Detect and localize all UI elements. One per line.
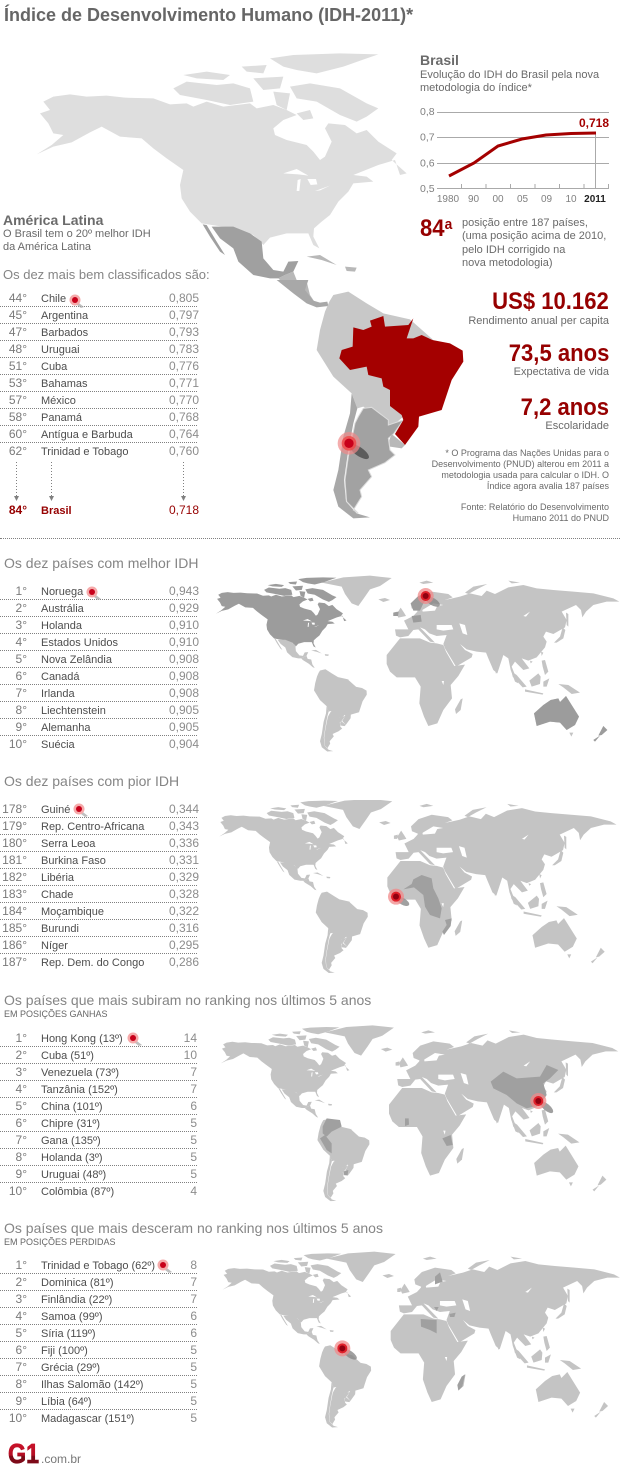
- table: rose most: 5: [190, 1150, 197, 1164]
- table: Latin America ranking: 44°: [9, 291, 27, 305]
- table: Latin America ranking: México: [41, 395, 76, 407]
- table: fell most: 10°: [9, 1411, 27, 1425]
- table: Latin America ranking: 60°: [9, 427, 27, 441]
- stat: income: US$ 10.162: [492, 288, 609, 315]
- row: Brasil: 0,718: [169, 503, 199, 517]
- line chart: IDH evolution: 2011: [584, 194, 606, 205]
- footnote: Índice agora avalia 187 países: [487, 481, 609, 491]
- table: best HDI: Holanda: [41, 620, 82, 632]
- table: rose most: 7°: [16, 1133, 27, 1147]
- table: worst HDI: 186°: [2, 938, 27, 952]
- table: Latin America ranking: 51°: [9, 359, 27, 373]
- table: Latin America ranking: Antígua e Barbuda: [41, 429, 133, 441]
- table: best HDI: Liechtenstein: [41, 705, 106, 717]
- heading: fell most: Os países que mais desceram no ranking nos últimos 5 anos: [4, 1220, 383, 1236]
- table: rose most: [0, 1031, 197, 1198]
- text: position: (uma posição acima de 2010,: [462, 230, 606, 242]
- table: worst HDI: Chade: [41, 889, 73, 901]
- table: worst HDI: 0,295: [169, 938, 199, 952]
- source: [461, 502, 609, 523]
- table: fell most: [0, 1258, 197, 1425]
- table: worst HDI: Rep. Centro-Africana: [41, 821, 144, 833]
- line chart: IDH evolution: [420, 106, 609, 205]
- table: worst HDI: Libéria: [41, 872, 74, 884]
- row: Brasil: [9, 503, 199, 517]
- table: worst HDI: 0,344: [169, 802, 199, 816]
- text: position: nova metodologia): [462, 257, 553, 269]
- line chart: IDH evolution: 1980: [437, 194, 460, 205]
- table: worst HDI: Moçambique: [41, 906, 104, 918]
- table: fell most: Madagascar (151º): [41, 1413, 134, 1425]
- table: fell most: Ilhas Salomão (142º): [41, 1379, 143, 1391]
- table: worst HDI: Rep. Dem. do Congo: [41, 957, 144, 969]
- table: worst HDI: Burkina Faso: [41, 855, 106, 867]
- table: rose most: Venezuela (73º): [41, 1067, 119, 1079]
- table: best HDI: Noruega: [41, 586, 83, 598]
- table: rose most: 7: [190, 1082, 197, 1096]
- table: fell most: 8: [190, 1258, 197, 1272]
- table: best HDI: 4°: [16, 635, 27, 649]
- table: best HDI: 0,908: [169, 652, 199, 666]
- panel: América Latina: [3, 212, 210, 282]
- line chart: IDH evolution: 0,5: [420, 183, 435, 195]
- line chart: IDH evolution: 90: [468, 194, 479, 205]
- table: best HDI: [0, 584, 199, 751]
- table: rose most: Colômbia (87º): [41, 1186, 114, 1198]
- row: Brasil: 84°: [9, 503, 27, 517]
- table: rose most: 5°: [16, 1099, 27, 1113]
- callout: 84th position: [420, 215, 606, 269]
- line chart: IDH evolution: 09: [541, 194, 552, 205]
- table: worst HDI: 182°: [2, 870, 27, 884]
- table: worst HDI: 0,328: [169, 887, 199, 901]
- table: rose most: Cuba (51º): [41, 1050, 94, 1062]
- table: best HDI: 0,943: [169, 584, 199, 598]
- footnote: [432, 448, 609, 491]
- arrows: down to Brasil: [14, 462, 186, 501]
- line chart: IDH evolution: 0,718: [579, 116, 609, 130]
- stat: income: [468, 288, 609, 327]
- table: fell most: 5: [190, 1394, 197, 1408]
- line chart: IDH evolution: 0,6: [420, 158, 435, 170]
- footnote: metodologia usada para calcular o IDH. O: [441, 470, 609, 480]
- subheading: top ten: Os dez mais bem classificados são:: [3, 267, 210, 282]
- table: fell most: 5: [190, 1343, 197, 1357]
- table: rose most: 7: [190, 1065, 197, 1079]
- table: Latin America ranking: 0,768: [169, 410, 199, 424]
- table: rose most: 8°: [16, 1150, 27, 1164]
- table: Latin America ranking: 0,771: [169, 376, 199, 390]
- table: worst HDI: 0,336: [169, 836, 199, 850]
- map: fell most: [223, 1252, 620, 1428]
- table: Latin America ranking: Trinidad e Tobago: [41, 446, 128, 458]
- table: Latin America ranking: 0,805: [169, 291, 199, 305]
- table: Latin America ranking: Panamá: [41, 412, 82, 424]
- table: worst HDI: Serra Leoa: [41, 838, 95, 850]
- table: rose most: 10: [184, 1048, 197, 1062]
- table: fell most: 6°: [16, 1343, 27, 1357]
- table: best HDI: 6°: [16, 669, 27, 683]
- table: fell most: 5°: [16, 1326, 27, 1340]
- table: best HDI: 9°: [16, 720, 27, 734]
- table: worst HDI: 0,316: [169, 921, 199, 935]
- table: best HDI: 7°: [16, 686, 27, 700]
- line chart: IDH evolution: 0,8: [420, 106, 435, 118]
- pin: Chile on map: [338, 432, 371, 462]
- heading: worst HDI: Os dez países com pior IDH: [4, 773, 179, 789]
- heading: best HDI: Os dez países com melhor IDH: [4, 555, 199, 571]
- table: Latin America ranking: 0,760: [169, 444, 199, 458]
- heading: rose most: Os países que mais subiram no ranking nos últimos 5 anos: [4, 992, 371, 1008]
- table: Latin America ranking: 0,783: [169, 342, 199, 356]
- table: best HDI: 0,929: [169, 601, 199, 615]
- table: best HDI: 5°: [16, 652, 27, 666]
- table: fell most: 7: [190, 1275, 197, 1289]
- text: position: [462, 217, 606, 269]
- table: best HDI: 1°: [16, 584, 27, 598]
- table: best HDI: 8°: [16, 703, 27, 717]
- map: best HDI: [216, 576, 619, 752]
- icon: Guinea pin: [74, 804, 88, 817]
- table: best HDI: 0,910: [169, 635, 199, 649]
- table: Latin America ranking: 57°: [9, 393, 27, 407]
- subheading: positions gained: EM POSIÇÕES GANHAS: [4, 1009, 108, 1019]
- table: Latin America ranking: 45°: [9, 308, 27, 322]
- text: position: pelo IDH corrigido na: [462, 244, 565, 256]
- table: best HDI: 10°: [9, 737, 27, 751]
- table: worst HDI: Níger: [41, 940, 68, 952]
- table: worst HDI: 0,331: [169, 853, 199, 867]
- table: rose most: 2°: [16, 1048, 27, 1062]
- stat: schooling: Escolaridade: [545, 420, 609, 432]
- table: Latin America ranking: [0, 291, 199, 458]
- table: fell most: Trinidad e Tobago (62º): [41, 1260, 155, 1272]
- table: rose most: Uruguai (48º): [41, 1169, 106, 1181]
- icon: Chile pin: [70, 294, 84, 308]
- table: best HDI: 3°: [16, 618, 27, 632]
- subtitle: evolution: metodologia do índice*: [420, 82, 532, 94]
- table: Latin America ranking: Uruguai: [41, 344, 80, 356]
- table: rose most: Gana (135º): [41, 1135, 101, 1147]
- icon: Hong Kong pin: [128, 1032, 142, 1046]
- table: worst HDI: 178°: [2, 802, 27, 816]
- line chart: IDH evolution: 0,7: [420, 132, 435, 144]
- table: rose most: 1°: [16, 1031, 27, 1045]
- North America: [37, 53, 407, 305]
- table: best HDI: 2°: [16, 601, 27, 615]
- table: worst HDI: Burundi: [41, 923, 79, 935]
- title: Índice de Desenvolvimento Humano (IDH-2011)*: [4, 5, 413, 25]
- table: fell most: Fiji (100º): [41, 1345, 88, 1357]
- table: fell most: Dominica (81º): [41, 1277, 113, 1289]
- line chart: IDH evolution: 10: [565, 194, 577, 205]
- map: Americas with Brazil highlighted: [38, 54, 464, 518]
- table: Latin America ranking: 47°: [9, 325, 27, 339]
- table: Latin America ranking: Argentina: [41, 310, 88, 322]
- subheading: positions lost: EM POSIÇÕES PERDIDAS: [4, 1237, 116, 1247]
- stat: life expectancy: 73,5 anos: [508, 340, 609, 367]
- table: Latin America ranking: 0,764: [169, 427, 199, 441]
- text: position: posição entre 187 países,: [462, 217, 588, 229]
- table: rose most: 3°: [16, 1065, 27, 1079]
- table: worst HDI: [0, 802, 199, 969]
- table: best HDI: Canadá: [41, 671, 80, 683]
- table: fell most: 5: [190, 1360, 197, 1374]
- table: best HDI: Estados Unidos: [41, 637, 118, 649]
- footnote: * O Programa das Nações Unidas para o: [445, 448, 609, 458]
- table: best HDI: 0,908: [169, 669, 199, 683]
- table: worst HDI: 185°: [2, 921, 27, 935]
- panel: Brasil evolution: [420, 52, 600, 94]
- table: rose most: Hong Kong (13º): [41, 1033, 123, 1045]
- row: Brasil: Brasil: [41, 505, 72, 517]
- table: fell most: 1°: [16, 1258, 27, 1272]
- table: worst HDI: 184°: [2, 904, 27, 918]
- table: Latin America ranking: 48°: [9, 342, 27, 356]
- table: Latin America ranking: Chile: [41, 293, 66, 305]
- table: rose most: 5: [190, 1133, 197, 1147]
- table: fell most: 4°: [16, 1309, 27, 1323]
- logo text: .com.br: [41, 1452, 81, 1466]
- footnote: Desenvolvimento (PNUD) alterou em 2011 a: [432, 459, 609, 469]
- table: worst HDI: 180°: [2, 836, 27, 850]
- table: best HDI: 0,905: [169, 703, 199, 717]
- number: 84a: 84a: [420, 215, 452, 242]
- table: best HDI: Nova Zelândia: [41, 654, 112, 666]
- table: fell most: 8°: [16, 1377, 27, 1391]
- table: rose most: 4°: [16, 1082, 27, 1096]
- table: rose most: Holanda (3º): [41, 1152, 102, 1164]
- stat: life expectancy: Expectativa de vida: [514, 366, 609, 378]
- table: best HDI: 0,908: [169, 686, 199, 700]
- table: rose most: 10°: [9, 1184, 27, 1198]
- subtitle: evolution: Evolução do IDH do Brasil pela nova: [420, 69, 599, 81]
- source: Humano 2011 do PNUD: [513, 513, 609, 523]
- table: rose most: 5: [190, 1167, 197, 1181]
- map: worst HDI: [220, 800, 616, 973]
- table: worst HDI: 187°: [2, 955, 27, 969]
- table: rose most: 5: [190, 1116, 197, 1130]
- table: fell most: 6: [190, 1326, 197, 1340]
- table: Latin America ranking: Cuba: [41, 361, 67, 373]
- table: Latin America ranking: 62°: [9, 444, 27, 458]
- table: Latin America ranking: 0,770: [169, 393, 199, 407]
- table: best HDI: Suécia: [41, 739, 75, 751]
- table: fell most: 5: [190, 1411, 197, 1425]
- heading: América Latina: América Latina: [3, 212, 103, 228]
- table: rose most: 4: [190, 1184, 197, 1198]
- table: fell most: Finlândia (22º): [41, 1294, 112, 1306]
- table: fell most: Líbia (64º): [41, 1396, 92, 1408]
- subtitle: Brasil in Latin America: O Brasil tem o 20º melhor IDH: [3, 228, 151, 240]
- icon: Norway pin: [86, 586, 101, 600]
- table: worst HDI: 0,329: [169, 870, 199, 884]
- table: fell most: 7°: [16, 1360, 27, 1374]
- South America: [277, 280, 463, 518]
- table: Latin America ranking: 0,793: [169, 325, 199, 339]
- table: rose most: 6°: [16, 1116, 27, 1130]
- table: rose most: China (101º): [41, 1101, 102, 1113]
- stat: income: Rendimento anual per capita: [468, 315, 609, 327]
- icon: Trinidad pin: [158, 1260, 172, 1273]
- table: Latin America ranking: 53°: [9, 376, 27, 390]
- source: Fonte: Relatório do Desenvolvimento: [461, 502, 609, 512]
- table: rose most: 9°: [16, 1167, 27, 1181]
- table: Latin America ranking: Barbados: [41, 327, 88, 339]
- table: worst HDI: 0,322: [169, 904, 199, 918]
- table: worst HDI: 179°: [2, 819, 27, 833]
- table: fell most: 3°: [16, 1292, 27, 1306]
- heading: Brasil: Brasil: [420, 52, 459, 68]
- stat: schooling: 7,2 anos: [521, 394, 609, 421]
- table: best HDI: 0,910: [169, 618, 199, 632]
- subtitle: Brasil in Latin America: da América Latina: [3, 241, 91, 253]
- subtitle: evolution: [420, 69, 600, 94]
- table: best HDI: Alemanha: [41, 722, 91, 734]
- table: fell most: 7: [190, 1292, 197, 1306]
- table: fell most: 5: [190, 1377, 197, 1391]
- table: rose most: 14: [184, 1031, 197, 1045]
- map: rose most: [221, 1025, 618, 1202]
- line chart: IDH evolution: 00: [492, 194, 504, 205]
- table: rose most: Chipre (31º): [41, 1118, 100, 1130]
- table: rose most: 6: [190, 1099, 197, 1113]
- table: best HDI: Austrália: [41, 603, 84, 615]
- table: worst HDI: 183°: [2, 887, 27, 901]
- table: Latin America ranking: Bahamas: [41, 378, 87, 390]
- table: rose most: Tanzânia (152º): [41, 1084, 118, 1096]
- table: Latin America ranking: 0,776: [169, 359, 199, 373]
- table: Latin America ranking: 0,797: [169, 308, 199, 322]
- table: fell most: Grécia (29º): [41, 1362, 100, 1374]
- table: Latin America ranking: 58°: [9, 410, 27, 424]
- table: fell most: Síria (119º): [41, 1328, 96, 1340]
- table: fell most: 2°: [16, 1275, 27, 1289]
- table: fell most: Samoa (99º): [41, 1311, 102, 1323]
- table: fell most: 6: [190, 1309, 197, 1323]
- table: best HDI: 0,904: [169, 737, 199, 751]
- table: worst HDI: 181°: [2, 853, 27, 867]
- table: best HDI: 0,905: [169, 720, 199, 734]
- table: worst HDI: 0,286: [169, 955, 199, 969]
- logo: G1: [8, 1440, 81, 1466]
- table: best HDI: Irlanda: [41, 688, 75, 700]
- table: worst HDI: 0,343: [169, 819, 199, 833]
- subtitle: Brasil in Latin America: [3, 228, 151, 253]
- line chart: IDH evolution: 05: [517, 194, 528, 205]
- table: fell most: 9°: [16, 1394, 27, 1408]
- table: worst HDI: Guiné: [41, 804, 70, 816]
